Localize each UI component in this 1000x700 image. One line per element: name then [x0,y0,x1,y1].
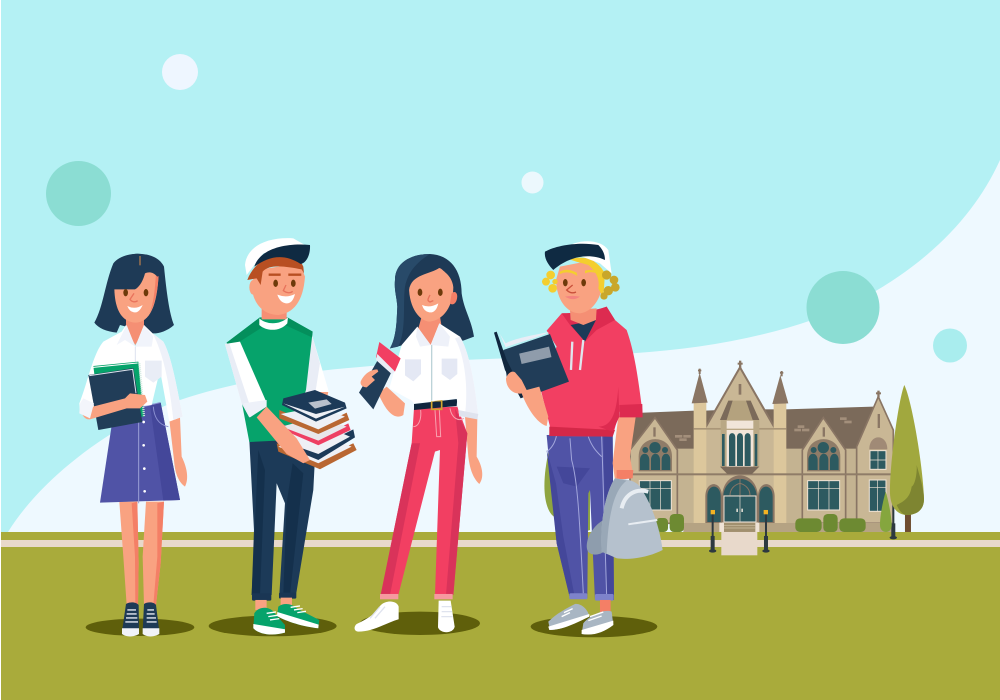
roof right [785,407,873,449]
central bay window [720,401,759,474]
shirt pockets [405,359,457,381]
arm right [169,417,187,487]
student 1: girl with notebooks and 2: boy with books [79,238,357,636]
shadow [531,616,657,637]
shadow [360,612,480,635]
skirt [100,403,180,503]
gable far right [857,397,893,523]
jeans [547,434,614,600]
arm with bag [613,415,636,480]
neck [126,315,144,345]
pale hill curve [8,160,1000,540]
backpack [587,478,663,559]
shirt [79,325,183,422]
ankles [255,600,267,610]
tree behind student [544,450,590,535]
eyes and mouth [563,279,568,286]
lower windows [639,451,886,511]
gray shoes [548,604,589,630]
roof left [627,411,695,449]
hedges [656,514,866,532]
collar [259,317,288,330]
hair [390,254,474,348]
face [252,263,305,315]
forearm holding notebook [80,393,147,419]
left sleeve [225,342,267,417]
girl 1 [79,254,194,636]
turrets [692,361,881,523]
central gable [705,367,775,523]
ankles [600,600,611,613]
steps and base [683,523,893,532]
neck [570,308,597,325]
shadow [209,616,337,636]
eyes and smile [418,289,422,296]
cap [245,238,305,275]
book and hand [359,342,401,409]
forearm and hand [506,372,548,426]
eyes and smile [273,280,278,287]
curly blond hair [542,258,620,300]
ear [249,280,257,295]
trousers [381,407,467,595]
shadow [86,619,194,636]
university building [627,361,924,555]
sneakers [122,602,139,636]
hair [247,254,304,285]
books stack [276,390,357,469]
open book [494,332,569,398]
lawn [1,532,1000,700]
walkway to door [721,532,757,555]
left gothic window [639,439,672,471]
roof brick marks [675,417,852,441]
face [409,267,453,322]
small arch far right [869,437,887,449]
arm right [465,417,482,484]
bangs [112,254,164,289]
skirt buttons [142,421,146,493]
right sleeve [305,334,329,397]
white shoes [355,602,399,632]
lamp posts [709,497,897,553]
girl 2 [355,254,482,635]
arm behind [307,392,328,400]
hair top [407,259,442,290]
belt [414,399,457,410]
horizontal moulding [630,473,893,475]
forearm and hand [257,407,310,463]
sweater vest [227,317,313,442]
face [114,270,159,323]
tall tree [890,385,924,532]
right gothic window [807,439,840,471]
gable left [630,418,677,523]
neck [262,305,287,319]
students 3 and 4 [355,241,663,637]
hoodie [540,307,643,437]
boy 1 [209,238,357,636]
legs [119,502,139,605]
green shoes [253,608,285,634]
sky background [1,0,1000,540]
neck [418,317,442,345]
wall [630,449,893,523]
eyes and smile [123,289,128,296]
main entrance [705,475,775,523]
shirt [389,323,478,417]
trousers [249,438,316,595]
boy 2 [494,241,663,637]
face [556,260,603,313]
cap [562,241,612,273]
notebooks [93,362,144,420]
hair back [94,254,174,333]
small cypress [880,492,892,532]
forearm [378,387,405,417]
gable right [802,418,846,523]
decorative circles [46,54,967,362]
